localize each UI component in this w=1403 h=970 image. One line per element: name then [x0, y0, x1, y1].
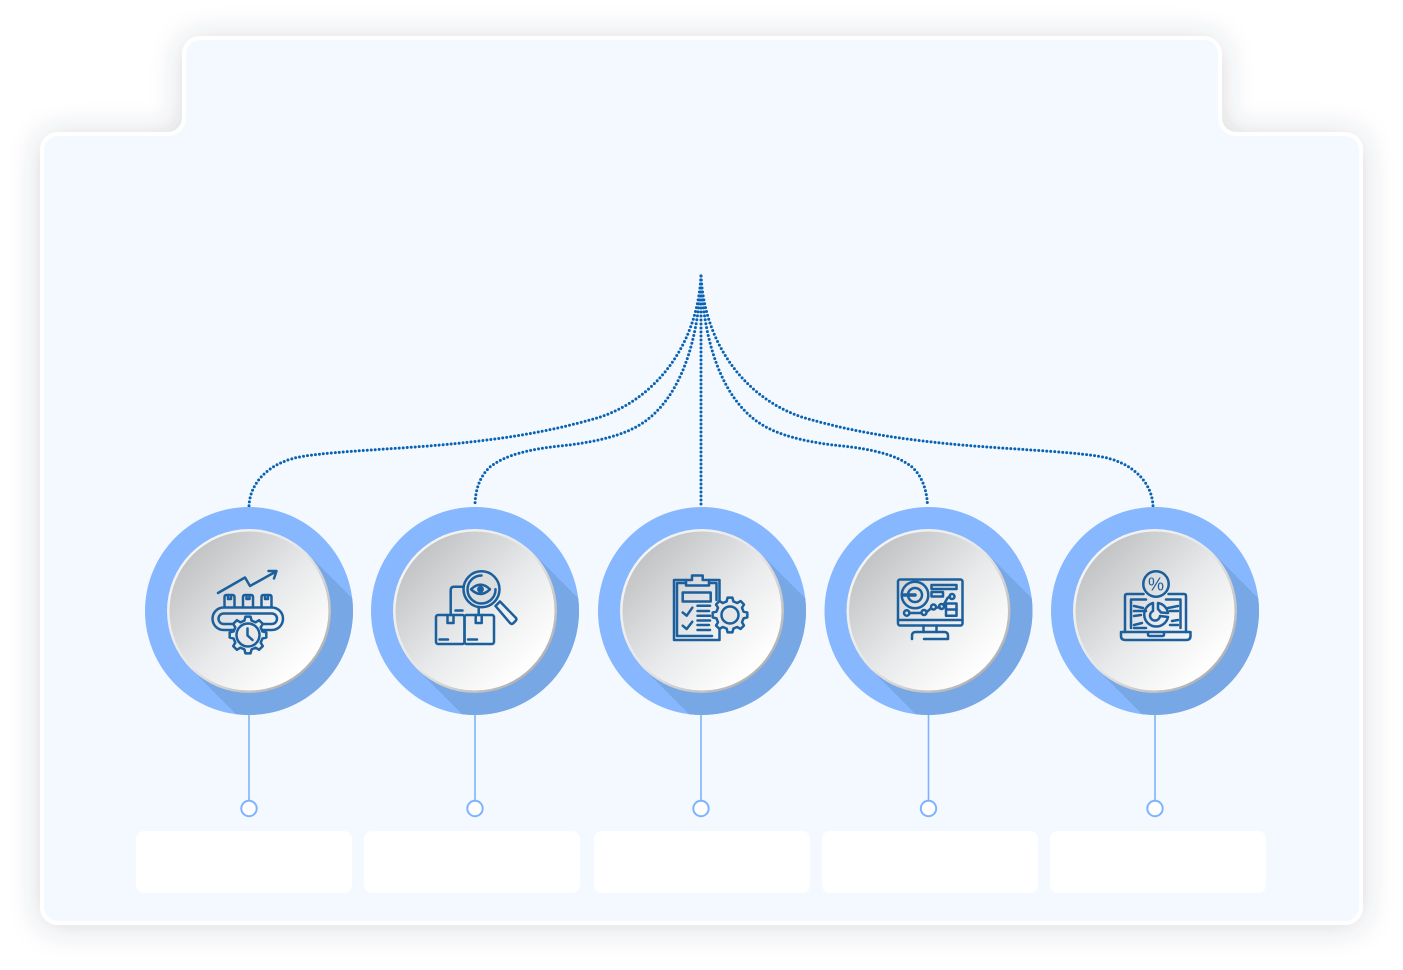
label box: step 4	[822, 831, 1038, 893]
label box: step 2	[364, 831, 580, 893]
connector line and node: step 1	[241, 715, 257, 816]
label box: step 5	[1050, 831, 1266, 893]
step 1 circle	[145, 507, 353, 715]
icon: clipboard checklist with gear	[674, 576, 747, 640]
icon: conveyor belt with growth arrow and clock gear	[212, 571, 283, 653]
label box: step 1	[136, 831, 352, 893]
step 4 circle	[824, 507, 1032, 715]
connector line and node: step 4	[921, 715, 936, 816]
connector line and node: step 3	[693, 715, 709, 816]
dotted connectors from apex to circles	[249, 276, 1153, 506]
icon: monitor with analytics dashboard	[898, 580, 962, 639]
icon: boxes under magnifier with eye	[436, 571, 516, 644]
icon: laptop with pie chart and percent badge	[1121, 571, 1190, 640]
step 5 circle	[1051, 507, 1259, 715]
label box: step 3	[594, 831, 810, 893]
connector line and node: step 2	[467, 715, 483, 816]
step 3 circle	[598, 507, 806, 715]
connector line and node: step 5	[1147, 715, 1163, 816]
icon: laptop with pie chart and percent badge: %	[1148, 574, 1164, 594]
step 2 circle	[371, 507, 579, 715]
